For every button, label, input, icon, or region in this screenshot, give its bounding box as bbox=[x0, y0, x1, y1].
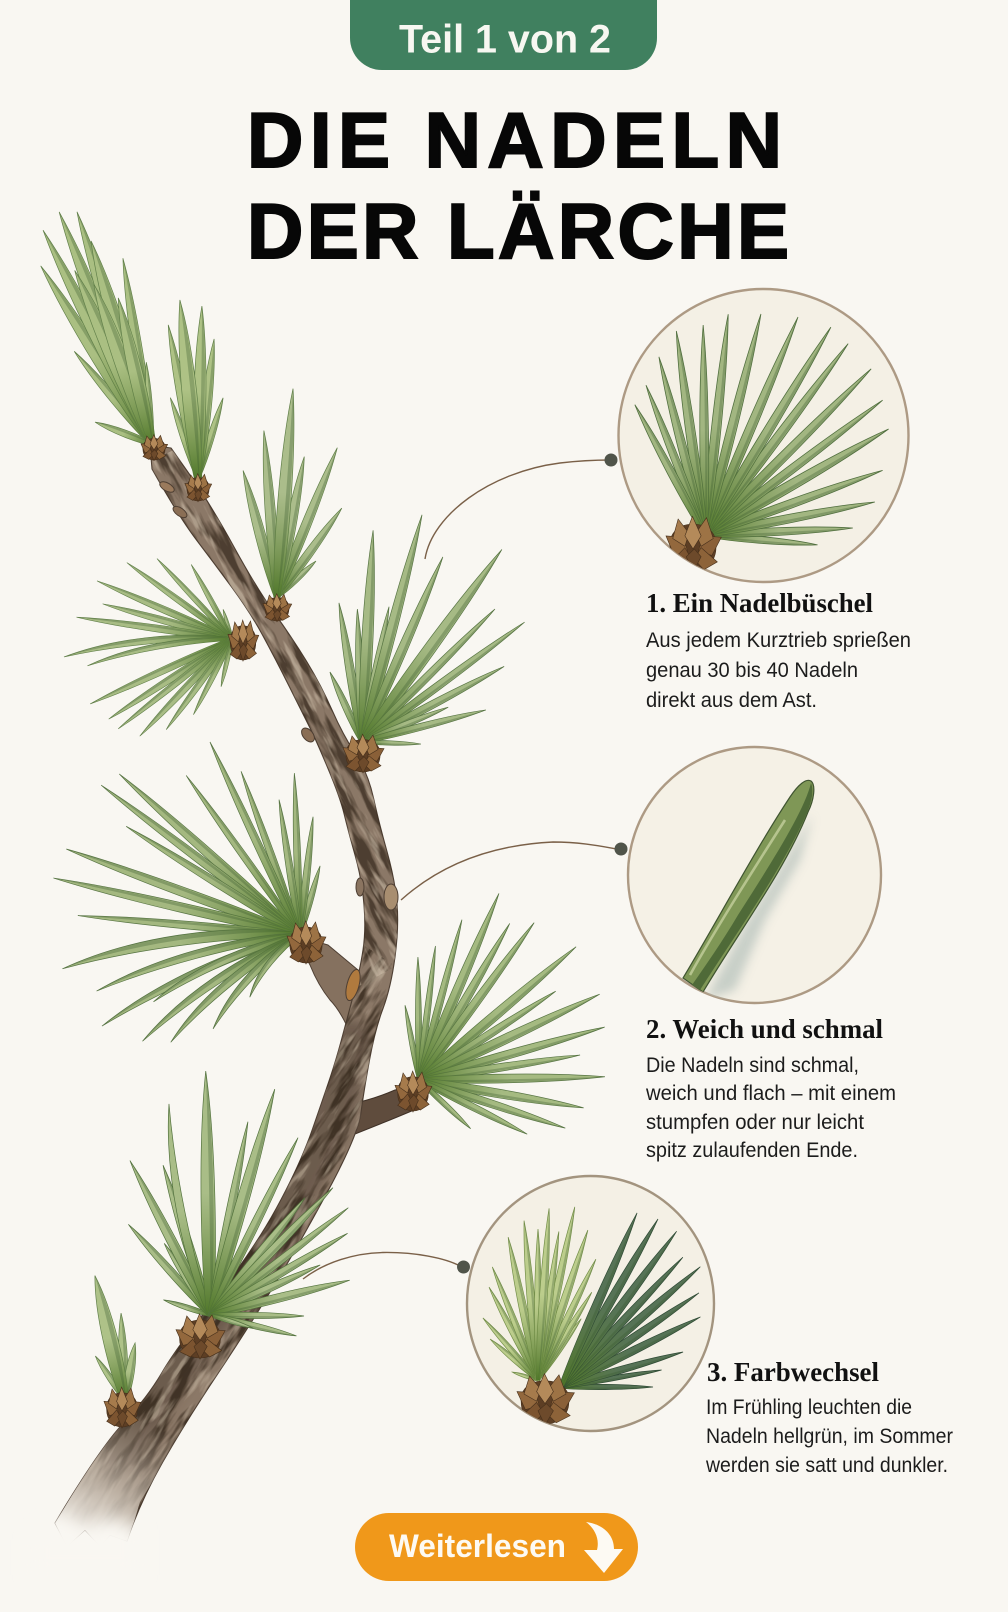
text block 2: stumpfen oder nur leicht bbox=[646, 1111, 864, 1134]
needle cluster B: second tuft bbox=[163, 299, 226, 479]
needle cluster E bbox=[327, 513, 527, 746]
connector line 1 bbox=[425, 460, 611, 559]
text block 1: direkt aus dem Ast. bbox=[646, 689, 817, 712]
panel 1: needle tuft detail bbox=[618, 289, 908, 582]
button: Weiterlesen bbox=[355, 1513, 638, 1581]
text block 2 bbox=[645, 1013, 896, 1162]
title: DIE NADELN bbox=[247, 96, 782, 184]
needle cluster C bbox=[238, 388, 345, 600]
dark summer needles bbox=[557, 1211, 703, 1391]
needle cluster D bbox=[63, 557, 235, 739]
needle cluster G: right lower bbox=[402, 892, 606, 1137]
branch wood bbox=[54, 446, 412, 1542]
scale buds on branch bbox=[104, 435, 432, 1428]
text block 2: weich und flach – mit einem bbox=[645, 1082, 896, 1105]
bark texture bbox=[55, 450, 398, 1540]
dot 2 bbox=[614, 842, 628, 856]
badge: Teil 1 von 2: Teil 1 von 2 bbox=[399, 18, 611, 62]
title: DER LÄRCHE bbox=[247, 187, 789, 275]
soft fade of the cut base bbox=[30, 1515, 140, 1575]
text block 1: Aus jedem Kurztrieb sprießen bbox=[646, 629, 911, 652]
text block 1 bbox=[646, 587, 911, 712]
needle cluster A: top tuft bbox=[35, 209, 160, 447]
text block 3: 3. Farbwechsel bbox=[707, 1356, 879, 1387]
text block 1: 1. Ein Nadelbüschel bbox=[646, 587, 873, 618]
needle cluster F: large left bbox=[52, 740, 323, 1044]
text block 2: Die Nadeln sind schmal, bbox=[646, 1054, 859, 1077]
text block 3 bbox=[705, 1356, 953, 1477]
panel 2: single needle detail bbox=[628, 747, 881, 1003]
connector line 2 bbox=[401, 842, 617, 900]
connector line 3 bbox=[303, 1252, 460, 1279]
text block 3: werden sie satt und dunkler. bbox=[705, 1454, 948, 1477]
dot 1 bbox=[604, 454, 618, 466]
text block 2: spitz zulaufenden Ende. bbox=[646, 1139, 858, 1162]
badge: Teil 1 von 2 bbox=[350, 0, 657, 70]
larch branch illustration bbox=[0, 209, 609, 1612]
light spring needles bbox=[481, 1206, 599, 1382]
tuft needles and bud bbox=[631, 313, 891, 572]
text block 2: 2. Weich und schmal bbox=[646, 1013, 883, 1044]
button: Weiterlesen: Weiterlesen bbox=[389, 1528, 566, 1564]
needle cluster I: small shoot bbox=[88, 1274, 139, 1402]
icon: curved arrow bbox=[584, 1522, 623, 1573]
panel 3: colour change detail bbox=[467, 1176, 714, 1431]
text block 1: genau 30 bis 40 Nadeln bbox=[646, 659, 858, 682]
title bbox=[247, 96, 789, 275]
needle close-up with shadow bbox=[683, 780, 814, 1000]
text block 3: Nadeln hellgrün, im Sommer bbox=[706, 1425, 953, 1448]
text block 3: Im Frühling leuchten die bbox=[706, 1396, 912, 1419]
dot 3 bbox=[457, 1260, 470, 1274]
spring and summer tufts bbox=[481, 1206, 703, 1425]
needle cluster H: bottom large bbox=[125, 1071, 351, 1339]
